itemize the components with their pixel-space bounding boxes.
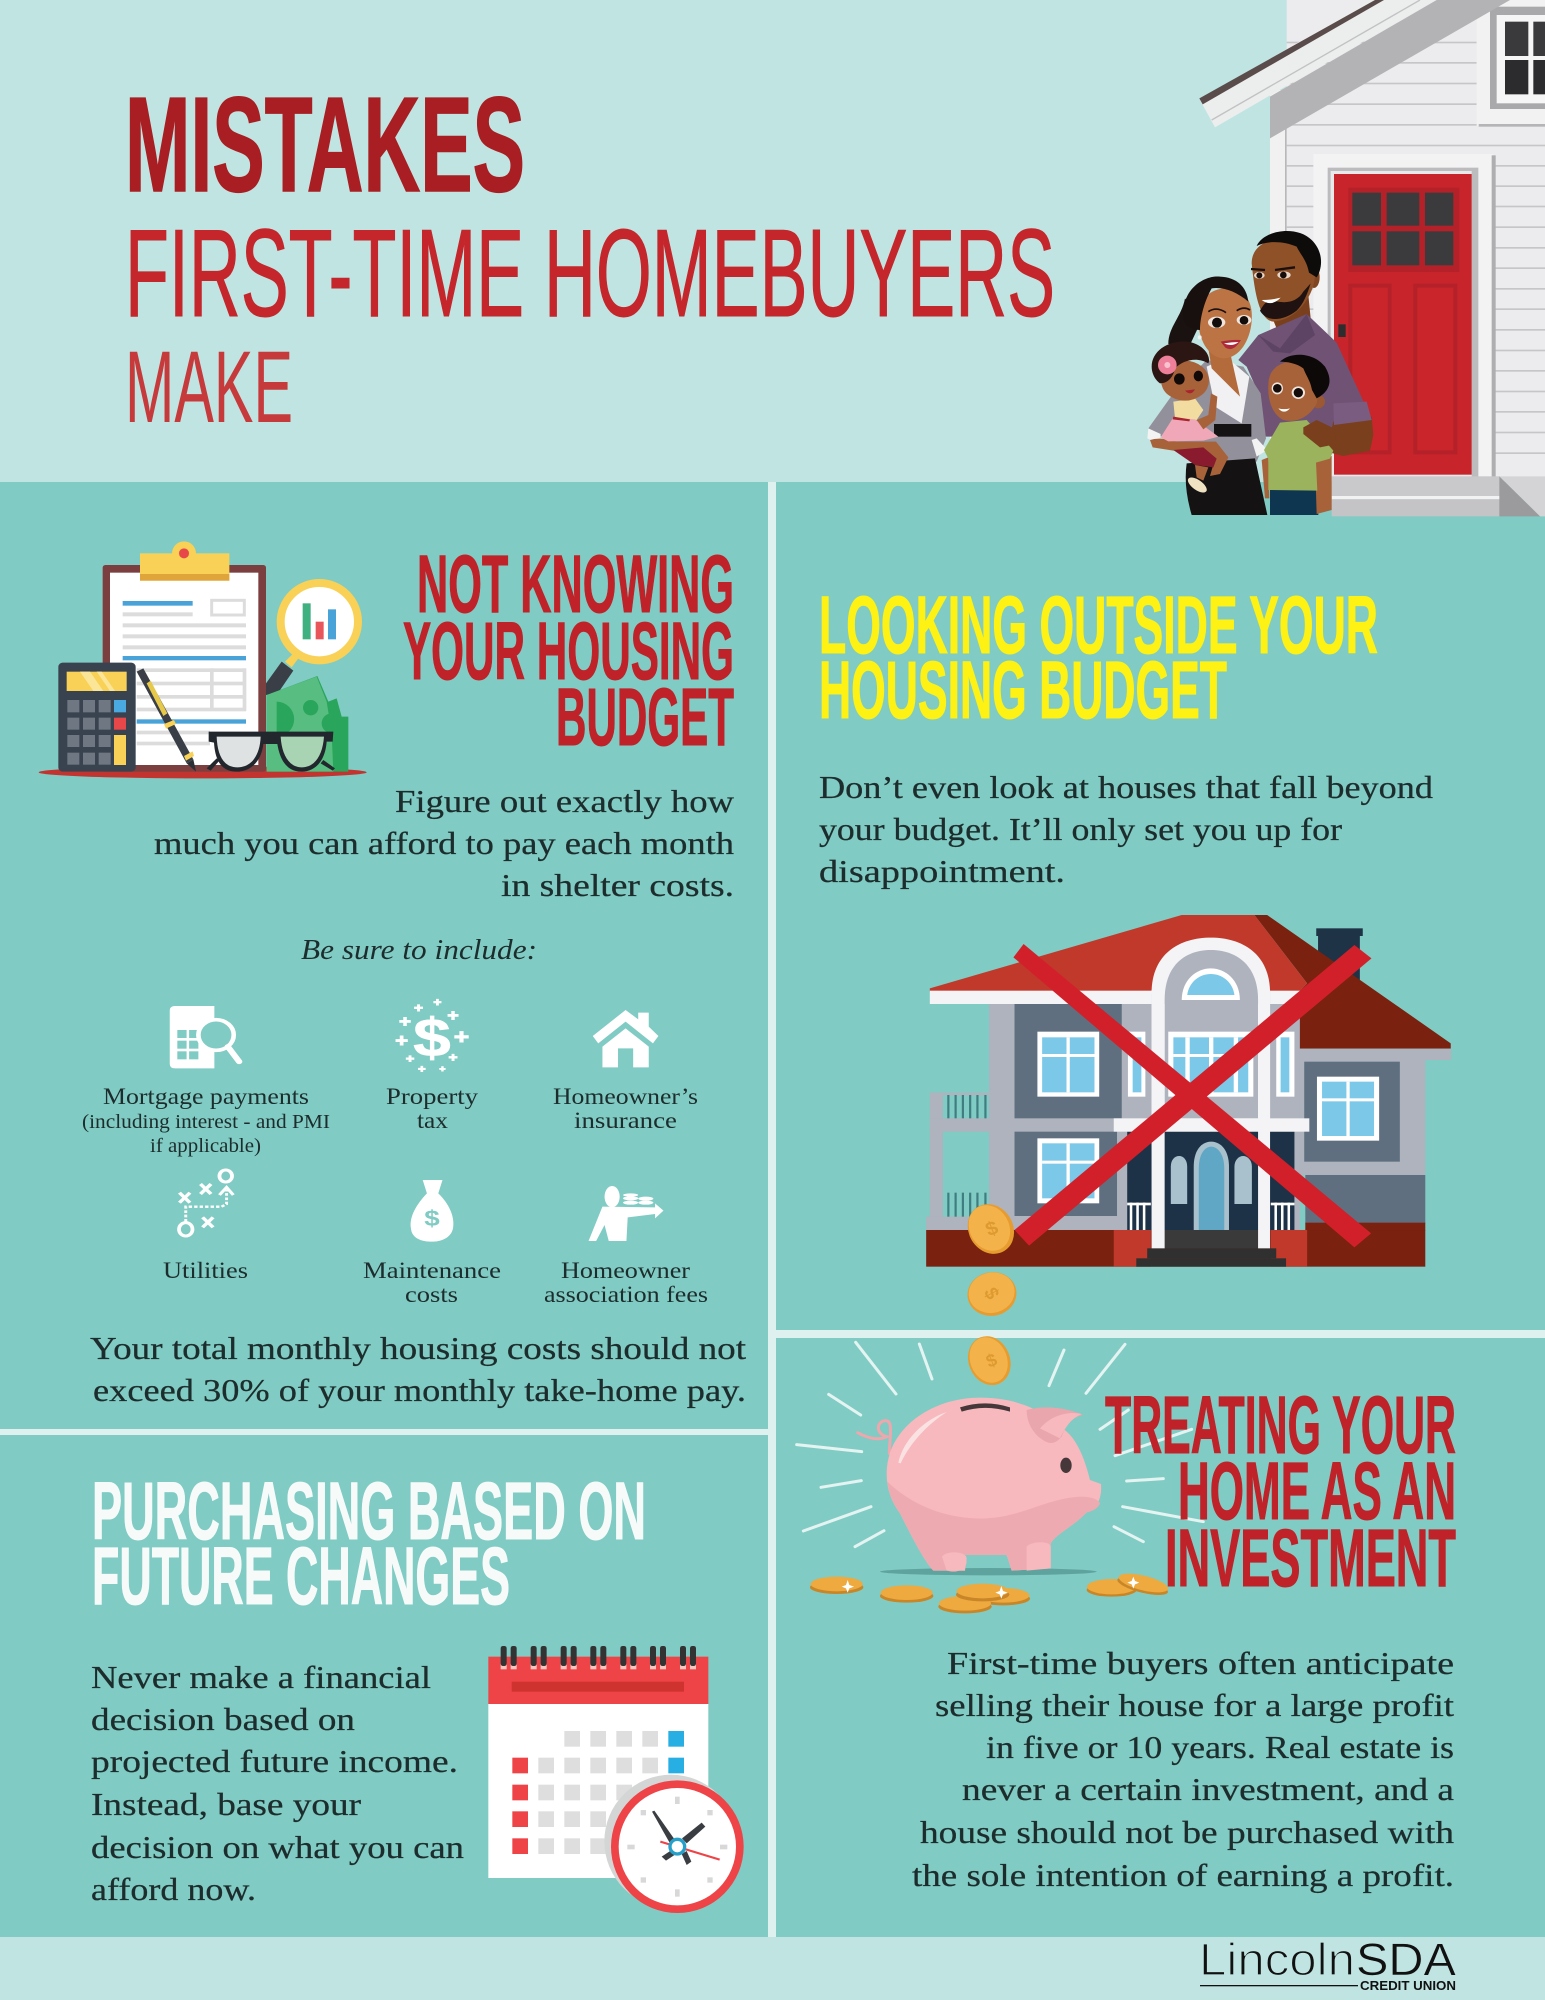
icon: property tax dollar with plus signs: +: [454, 1025, 469, 1048]
body text: figure out: in shelter costs.: [501, 867, 734, 903]
body text: first-time buyers: selling their house for a large profit: [935, 1687, 1454, 1723]
body text: 30 percent rule: exceed 30% of your monthly take-home pay.: [93, 1372, 746, 1408]
heading: purchasing based on future changes: FUTURE CHANGES: [92, 1531, 510, 1622]
heading: not knowing your housing budget: YOUR HOUSING: [403, 606, 734, 697]
item label: mortgage payments: Mortgage payments: [103, 1084, 309, 1109]
logo SDA: SDA: [1356, 1934, 1456, 1985]
item label: mortgage payments: (including interest - and PMI: [82, 1111, 330, 1133]
heading: treating your home as an investment: [1105, 1380, 1456, 1604]
panel: purchasing based on future changes: [91, 1466, 744, 1913]
icon: property tax dollar with plus signs: +: [440, 1065, 445, 1073]
icon: money bag: $: [424, 1207, 440, 1231]
body text: first-time buyers: the sole intention of earning a profit.: [912, 1857, 1454, 1893]
body text: never make a financial decision: afford now.: [91, 1871, 256, 1907]
icon: property tax dollar with plus signs: +: [414, 1001, 423, 1015]
panel: purchasing based on future changes background: [0, 1435, 768, 1937]
panel: not knowing your housing budget: [39, 539, 746, 1408]
footer band: [0, 1937, 1545, 2000]
body text: first-time buyers: never a certain investment, and a: [962, 1771, 1454, 1807]
logo credit union: CREDIT UNION: [1360, 1979, 1456, 1993]
pig tail: [858, 1421, 891, 1453]
item label: maintenance costs: [363, 1258, 501, 1307]
body text: never make a financial decision: projected future income.: [91, 1743, 458, 1779]
sparkle rays: [797, 1342, 1203, 1547]
coin on house edge: $: [983, 1217, 1001, 1241]
coin falling across divider: [959, 1264, 1025, 1324]
icon: property tax dollar with plus signs: +: [447, 1007, 459, 1024]
panel: not knowing your housing budget background: [0, 482, 768, 1429]
title line: make: MAKE: [125, 330, 293, 444]
illustration: clipboard, calculator, magnifier, money: [39, 541, 367, 778]
icon: property tax dollar with plus signs: $: [413, 1008, 451, 1067]
heading: not knowing your housing budget: NOT KNOWING: [417, 539, 734, 630]
right wing: [1299, 1049, 1451, 1223]
red X: [1013, 944, 1371, 1247]
coin on house edge: [960, 1198, 1022, 1260]
title: [125, 69, 1055, 444]
eave band: [930, 991, 1152, 1004]
body text: never make a financial decision: [91, 1659, 464, 1907]
woman's ponytail: [1168, 298, 1202, 348]
chimney: [1316, 928, 1363, 983]
baby girl: [1150, 341, 1228, 495]
icon: mortgage calculator and magnifier: [170, 1006, 239, 1068]
body text: figure out: [154, 783, 734, 903]
body text: figure out: much you can afford to pay each month: [154, 825, 734, 861]
footer logo: LincolnSDA Credit Union: [1199, 1934, 1456, 1993]
body text: first-time buyers: house should not be purchased with: [920, 1814, 1454, 1850]
coins on the ground: [810, 1570, 1170, 1613]
panel: treating your home as an investment: [797, 1330, 1456, 1893]
icon: property tax dollar with plus signs: +: [449, 1051, 457, 1064]
item label: mortgage payments: [82, 1084, 330, 1157]
calculator: [58, 663, 136, 772]
right eave band: [1270, 991, 1300, 1004]
body text: 30 percent rule: Your total monthly housing costs should not: [90, 1330, 746, 1366]
panel: looking outside budget background: [776, 482, 1545, 1330]
glasses: [207, 732, 335, 772]
item label: maintenance costs: Maintenance: [363, 1258, 501, 1283]
pig body: [887, 1398, 1101, 1572]
body text: never make a financial decision: Never make a financial: [91, 1659, 431, 1695]
body text: first-time buyers: First-time buyers often anticipate: [947, 1645, 1454, 1681]
body text: don't even look: your budget. It’ll only set you up for: [819, 811, 1342, 847]
front step: [1332, 476, 1545, 516]
item label: homeowner association fees: [544, 1258, 708, 1307]
pen: [137, 668, 196, 772]
icon: house insurance: [593, 1010, 658, 1067]
magnifying glass: [266, 583, 358, 695]
body text: don't even look: Don’t even look at houses that fall beyond: [819, 769, 1433, 805]
subheading: be sure to include: Be sure to include:: [301, 935, 537, 966]
calendar: [488, 1646, 708, 1878]
man's hand on shoulder: [1303, 420, 1337, 447]
roof fascia: [1200, 0, 1435, 127]
illustration: house front: [1199, 0, 1545, 516]
body text: first-time buyers: [912, 1645, 1454, 1893]
item label: homeowner's insurance: [553, 1084, 698, 1133]
icon: utilities play diagram: [179, 1170, 233, 1236]
body text: never make a financial decision: decision on what you can: [91, 1829, 464, 1865]
wall and siding: [1270, 0, 1545, 477]
boy: [1262, 355, 1333, 515]
logo rule: [1200, 1985, 1358, 1986]
item label: homeowner's insurance: Homeowner’s: [553, 1084, 698, 1109]
falling coin: [961, 1330, 1018, 1392]
table edge: [39, 766, 367, 778]
icon: property tax dollar with plus signs: [395, 996, 469, 1075]
ground shadow: [880, 1568, 1097, 1575]
body text: never make a financial decision: Instead, base your: [91, 1786, 361, 1822]
icon: money bag: [411, 1180, 453, 1242]
foundation: [926, 1223, 1425, 1267]
item label: homeowner's insurance: insurance: [574, 1108, 677, 1133]
item label: homeowner association fees: Homeowner: [561, 1258, 690, 1283]
roof shadow: [1270, 0, 1510, 138]
icon: property tax dollar with plus signs: +: [395, 1032, 408, 1051]
logo wordmark: Lincoln: [1199, 1934, 1355, 1985]
money: [267, 676, 348, 772]
item label: property tax: tax: [417, 1108, 449, 1133]
item label: mortgage payments: if applicable): [150, 1135, 261, 1157]
item label: utilities: Utilities: [163, 1258, 248, 1283]
main body: [989, 1004, 1300, 1231]
roof: [930, 915, 1451, 1049]
clock: [604, 1775, 744, 1913]
icon: property tax dollar with plus signs: +: [399, 1013, 411, 1030]
item label: maintenance costs: costs: [405, 1282, 458, 1307]
red door: [1313, 154, 1496, 477]
body text: first-time buyers: in five or 10 years. Real estate is: [986, 1729, 1454, 1765]
central tower with arch: [1128, 938, 1294, 1118]
body text: 30 percent rule: [90, 1330, 746, 1408]
icon: person presenting coins: [589, 1186, 663, 1241]
icon: property tax dollar with plus signs: +: [434, 996, 441, 1009]
heading: not knowing your housing budget: [403, 539, 734, 763]
illustration: calendar and clock: [488, 1646, 744, 1913]
clipboard: [103, 541, 266, 772]
header band: [0, 0, 1545, 482]
panel: looking outside your housing budget: [819, 580, 1451, 1267]
title line: mistakes: MISTAKES: [125, 69, 525, 220]
woman: [1147, 277, 1267, 515]
man: [1238, 231, 1373, 456]
body text: never make a financial decision: decision based on: [91, 1701, 355, 1737]
illustration: large house crossed out: [926, 915, 1451, 1267]
icon: property tax dollar with plus signs: +: [406, 1052, 414, 1065]
heading: purchasing based on future changes: PURCHASING BASED ON: [92, 1466, 646, 1557]
illustration: piggy bank with coins: [797, 1330, 1203, 1613]
item label: property tax: Property: [386, 1084, 479, 1109]
porch entrance: [1114, 1004, 1309, 1267]
body text: don't even look: [819, 769, 1433, 889]
panel: treating home as investment background: [776, 1338, 1545, 1937]
left balcony: [926, 1093, 990, 1231]
body text: figure out: Figure out exactly how: [395, 783, 734, 819]
item label: homeowner association fees: association fees: [544, 1282, 708, 1307]
body text: don't even look: disappointment.: [819, 853, 1065, 889]
heading: looking outside your housing budget: [819, 580, 1378, 736]
icon: property tax dollar with plus signs: +: [418, 1064, 426, 1075]
falling coin: $: [983, 1349, 1000, 1372]
heading: not knowing your housing budget: BUDGET: [556, 672, 734, 763]
coin falling across divider: $: [980, 1284, 1004, 1303]
item label: property tax: [386, 1084, 479, 1133]
heading: purchasing based on future changes: [92, 1466, 646, 1622]
illustration: family: [1147, 231, 1373, 515]
upper window: [1477, 0, 1545, 127]
